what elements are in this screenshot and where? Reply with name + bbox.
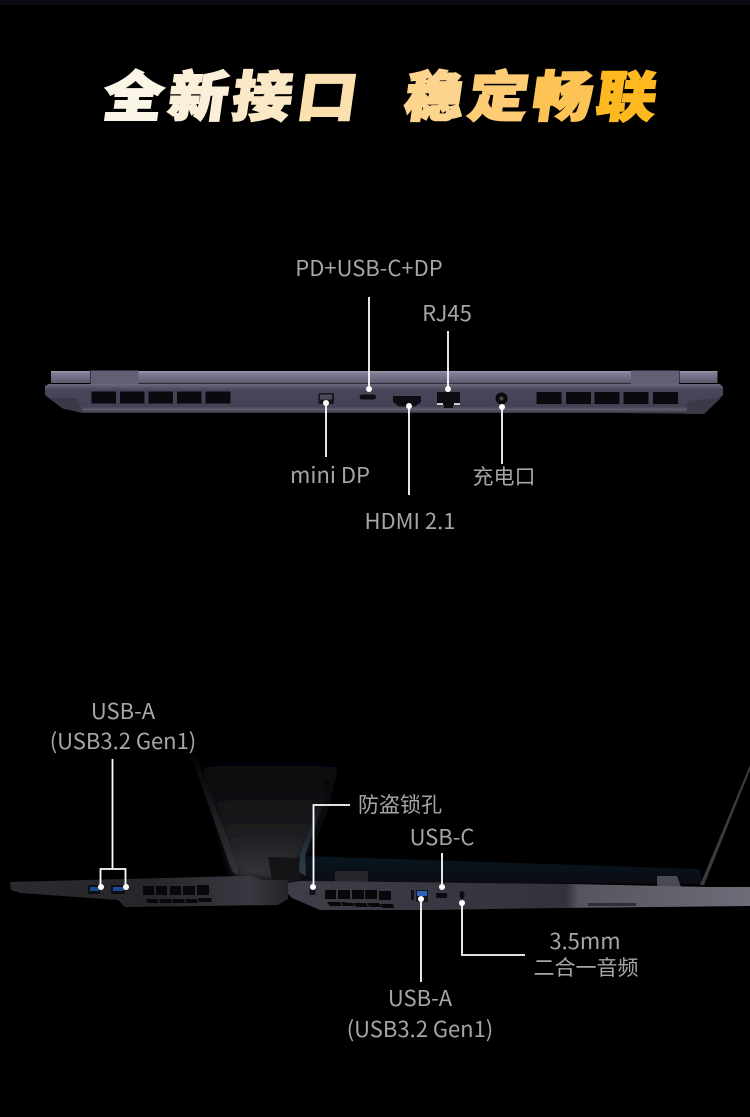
- title: 稳: [400, 54, 470, 132]
- right vents side: [325, 890, 394, 908]
- audio jack: [460, 891, 464, 899]
- title: 畅: [528, 54, 598, 132]
- callout: USB-A left: (USB3.2 Gen1): [50, 724, 196, 756]
- rear corner facets: [50, 398, 721, 414]
- title: 全: [99, 54, 169, 132]
- right lid far edge: [700, 765, 750, 885]
- callout: PD+USB-C+DP: [295, 251, 443, 392]
- callout: HDMI 2.1: [365, 403, 455, 536]
- lock slot: [310, 889, 316, 895]
- top edge strip: [0, 0, 750, 5]
- callout: RJ45: [422, 296, 472, 392]
- callout: lock: 防盗锁孔: [358, 789, 442, 819]
- left laptop body: [10, 876, 288, 907]
- callout: lock: [310, 789, 442, 890]
- title: 联: [592, 54, 662, 132]
- right laptop body: [288, 881, 750, 910]
- title: 接: [228, 54, 298, 132]
- rear body: [45, 384, 723, 414]
- callout: audio: 3.5mm: [549, 924, 621, 956]
- title: 新: [164, 54, 234, 132]
- port: power jack: [496, 392, 508, 404]
- left vents: [92, 392, 230, 404]
- callout: USB-A left: [50, 694, 196, 890]
- left USB-A ports: [88, 885, 125, 894]
- callout: charging port: [472, 404, 536, 491]
- callout: mini DP: [290, 400, 370, 490]
- callout: USB-A lower: (USB3.2 Gen1): [347, 1012, 493, 1044]
- left vents side: [143, 885, 212, 903]
- callout: mini DP: mini DP: [290, 458, 370, 490]
- callout: audio: [459, 900, 638, 982]
- speaker grille: [588, 903, 636, 906]
- callout: audio: 二合一音频: [534, 952, 638, 982]
- callout: HDMI 2.1: HDMI 2.1: [365, 504, 455, 536]
- callout: USB-A lower: USB-A: [388, 981, 453, 1013]
- callout: USB-A lower: [347, 896, 493, 1044]
- laptop side view: [10, 745, 750, 910]
- left laptop lid: [195, 745, 345, 880]
- title: 口: [293, 54, 363, 132]
- callouts side: [50, 694, 638, 1044]
- callout: USB-A left: USB-A: [91, 694, 156, 726]
- title: [99, 54, 662, 132]
- right lid left edge: [299, 780, 330, 876]
- callout: USB-C: [410, 820, 474, 890]
- port: USB-C: [360, 394, 376, 400]
- callout: USB-C: USB-C: [410, 820, 474, 852]
- side USB-C port: [436, 893, 447, 898]
- right vents: [536, 392, 678, 404]
- left lid edge: [190, 753, 238, 875]
- port: mini DP: [318, 393, 334, 404]
- callout: charging port: 充电口: [472, 461, 536, 491]
- callout: RJ45: RJ45: [422, 296, 472, 328]
- port: HDMI: [393, 396, 421, 406]
- right laptop screen strip: [300, 856, 702, 884]
- port: RJ45: [437, 392, 460, 408]
- hinge pieces: [335, 871, 681, 887]
- callouts rear: [290, 251, 536, 536]
- right USB-A port: [411, 890, 428, 902]
- rear hinge bar: [51, 370, 718, 384]
- left hinge: [268, 857, 302, 880]
- laptop rear view: [45, 370, 723, 414]
- callout: PD+USB-C+DP: PD+USB-C+DP: [295, 251, 443, 283]
- title: 定: [464, 54, 534, 132]
